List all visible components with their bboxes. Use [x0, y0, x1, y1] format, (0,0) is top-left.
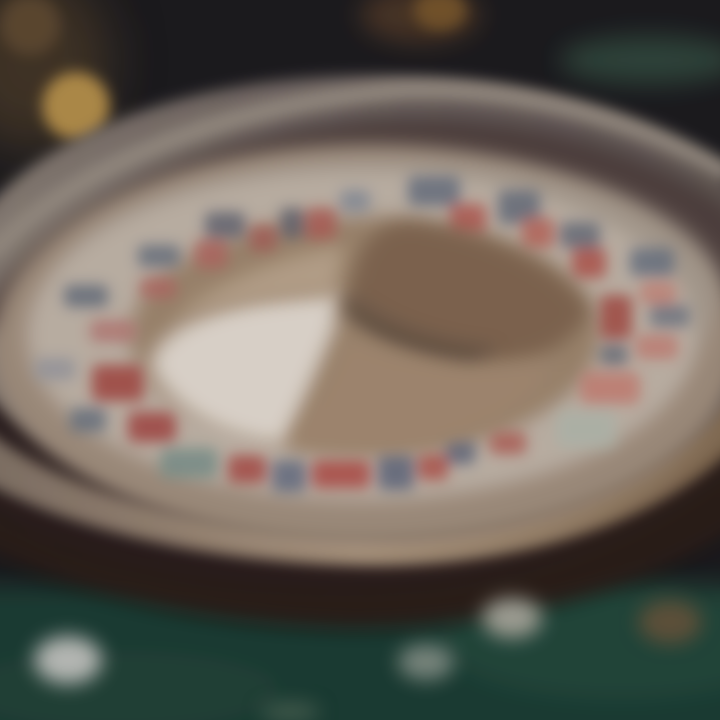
centre wedge: white panel [150, 290, 340, 445]
centre hub: tan cone [130, 217, 600, 453]
centre wedge: lower tan spokes [285, 335, 555, 450]
rim groove: dark shadow [0, 118, 720, 330]
inner wheel bowl: beige [0, 145, 720, 545]
wheel outer rim [0, 75, 720, 525]
number ring: pale background [27, 170, 697, 500]
icon: golden bokeh light [0, 0, 466, 140]
centre hub shadow [344, 290, 500, 368]
centre wedge: upper tan [175, 245, 345, 320]
number pockets: red and blue blurred ring [35, 176, 690, 492]
top inner track: soft grey [60, 160, 720, 430]
green felt table [0, 580, 720, 720]
rim highlight: upper left curve [0, 90, 720, 255]
dark lower wood band [0, 450, 720, 625]
centre wedge: dark brown cone [350, 221, 590, 362]
wheel base: dark wood [0, 153, 720, 617]
rim lower lip: tan [0, 390, 720, 566]
poker chips on felt [34, 598, 702, 720]
